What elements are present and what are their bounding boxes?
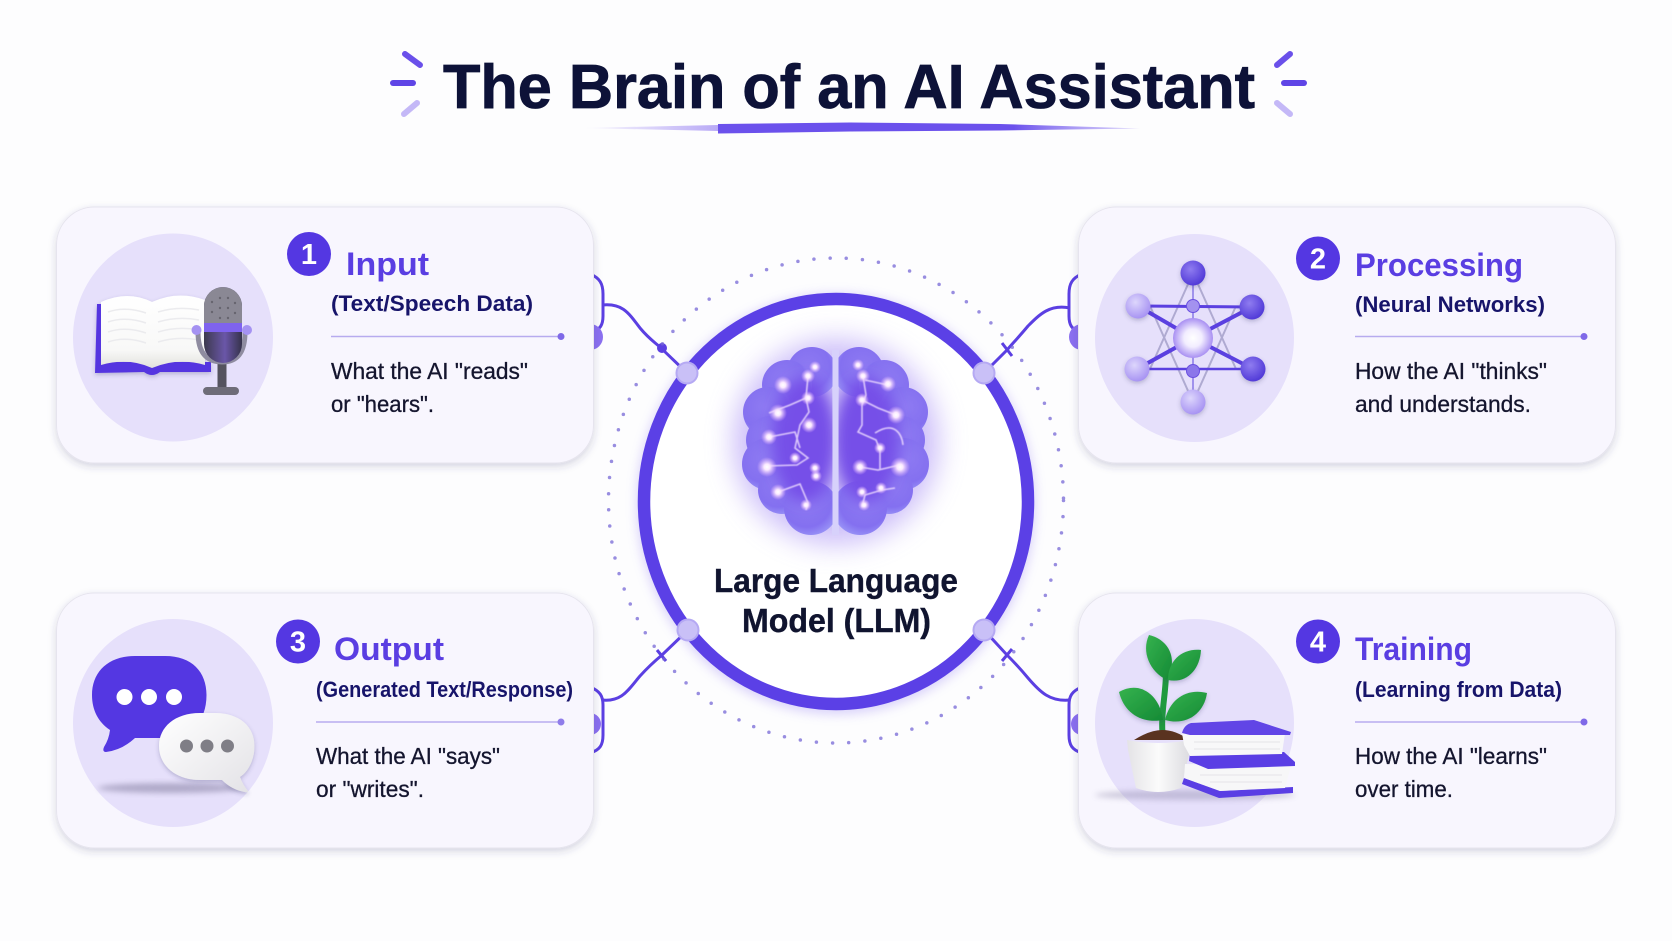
heading: Processing <box>1355 247 1523 283</box>
divider with dot <box>1355 333 1588 340</box>
connector: processing to LLM <box>984 274 1082 373</box>
title sparks left <box>393 54 420 114</box>
panel: output <box>56 593 594 848</box>
panel: input <box>56 207 594 463</box>
dotted orbit <box>608 258 1064 743</box>
connector: input to LLM <box>590 274 687 373</box>
subheading: (Text/Speech Data) <box>331 291 533 316</box>
number badge 2: 2 <box>1310 244 1326 276</box>
description: or "writes". <box>316 776 424 802</box>
divider with dot <box>331 333 564 340</box>
title underline <box>582 122 1140 134</box>
description <box>331 358 528 417</box>
number badge 1: 1 <box>301 239 317 271</box>
number badge 2 <box>1296 236 1340 280</box>
icon: brain <box>734 340 938 544</box>
hub label <box>714 562 958 639</box>
subheading: (Learning from Data) <box>1355 677 1562 702</box>
brain synapses <box>767 376 903 510</box>
connector: training to LLM <box>984 630 1082 753</box>
divider with dot <box>316 718 564 726</box>
icon: book and microphone <box>73 234 273 442</box>
description <box>316 743 500 802</box>
icon: neural network <box>1095 234 1294 442</box>
subheading: (Neural Networks) <box>1355 292 1545 317</box>
number badge 4 <box>1296 620 1340 664</box>
description: or "hears". <box>331 391 434 417</box>
subheading: (Generated Text/Response) <box>316 677 573 702</box>
lower book <box>1182 752 1295 798</box>
description: over time. <box>1355 776 1453 802</box>
panel: training <box>1078 593 1616 848</box>
description: What the AI "says" <box>316 743 500 769</box>
connector: output to LLM <box>590 630 688 753</box>
number badge 4: 4 <box>1310 626 1326 658</box>
heading: Training <box>1355 631 1472 667</box>
description: What the AI "reads" <box>331 358 528 384</box>
description <box>1355 358 1547 417</box>
icon: chat bubbles <box>73 619 273 827</box>
ring nodes <box>676 362 994 640</box>
hub label: Model (LLM) <box>742 602 931 639</box>
soil <box>1134 730 1189 740</box>
number badge 3: 3 <box>290 626 306 658</box>
pot <box>1127 740 1190 792</box>
heading: Input <box>346 246 429 282</box>
description: How the AI "thinks" <box>1355 358 1547 384</box>
title sparks right <box>1277 54 1304 114</box>
number badge 1 <box>287 232 331 276</box>
hub label: Large Language <box>714 562 958 599</box>
ring <box>644 299 1028 704</box>
panel: processing <box>1078 207 1616 463</box>
description <box>1355 743 1547 802</box>
description: How the AI "learns" <box>1355 743 1547 769</box>
heading: Output <box>334 631 444 667</box>
ring glow <box>644 301 1028 707</box>
number badge 3 <box>276 620 320 664</box>
icon: plant and books <box>1095 619 1295 827</box>
central LLM hub <box>608 258 1064 743</box>
title block <box>393 53 1304 134</box>
title text: The Brain of an AI Assistant <box>443 53 1255 122</box>
upper book <box>1182 720 1291 756</box>
divider with dot <box>1355 718 1588 726</box>
description: and understands. <box>1355 391 1531 417</box>
